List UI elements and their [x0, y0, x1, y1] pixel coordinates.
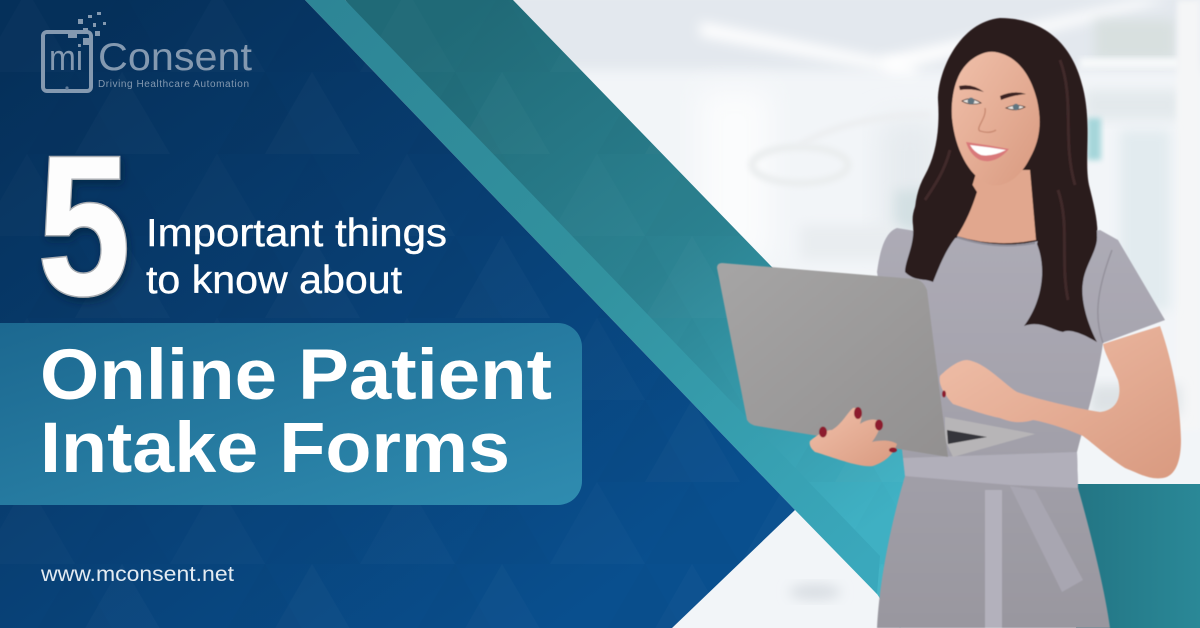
title text: Online Patient: [40, 336, 552, 415]
hair side locks over dress: [905, 150, 1097, 342]
dress: [877, 228, 1165, 628]
subheading: to know about: [146, 259, 402, 302]
logo tablet icon: mi: [49, 37, 83, 78]
left hand: [810, 390, 946, 466]
laptop keyboard: [947, 430, 987, 444]
blue background panel: [0, 0, 795, 628]
logo tagline: Driving Healthcare Automation: [98, 79, 249, 90]
subheading: [146, 212, 447, 302]
blurred clinic photo background: [513, 0, 1200, 628]
title pill: [0, 323, 582, 505]
website url: www.mconsent.net: [40, 563, 234, 586]
title text: [40, 336, 552, 488]
smile: [966, 142, 1009, 161]
laptop base: [945, 417, 1035, 457]
dress collar: [957, 237, 1035, 245]
face: [952, 52, 1040, 186]
teal corner block: [1076, 484, 1200, 628]
dress belt: [903, 452, 1083, 628]
big number 5: 5: [38, 115, 130, 336]
dress sleeve seam: [1098, 250, 1112, 343]
subheading: Important things: [146, 212, 447, 255]
neck and chest: [957, 170, 1036, 243]
teal diagonal panel: [305, 0, 1000, 628]
laptop lid: [717, 263, 948, 457]
hair back: [915, 18, 1097, 336]
hair highlights: [925, 60, 1075, 300]
eyes: [962, 99, 1025, 110]
right arm and hand: [940, 326, 1181, 478]
woman with laptop: [717, 18, 1181, 628]
logo tablet icon: [43, 12, 106, 91]
nose: [979, 108, 996, 132]
eyebrows: [959, 85, 1026, 100]
big number 5: 5: [38, 115, 130, 336]
title text: Intake Forms: [40, 409, 510, 488]
logo wordmark: Consent: [98, 36, 252, 79]
logo: mConsent: [43, 12, 252, 91]
